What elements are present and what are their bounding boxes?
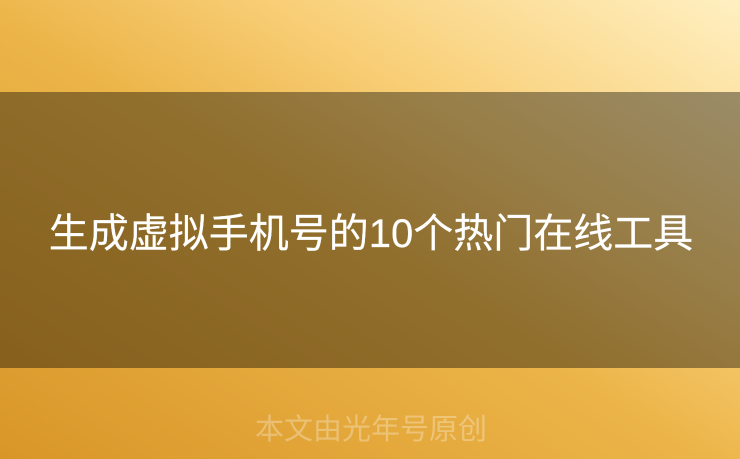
panel: dark title band bbox=[0, 92, 740, 368]
footer watermark text: 本文由光年号原创 bbox=[255, 414, 487, 446]
title: 生成虚拟手机号的10个热门在线工具 bbox=[49, 212, 693, 256]
